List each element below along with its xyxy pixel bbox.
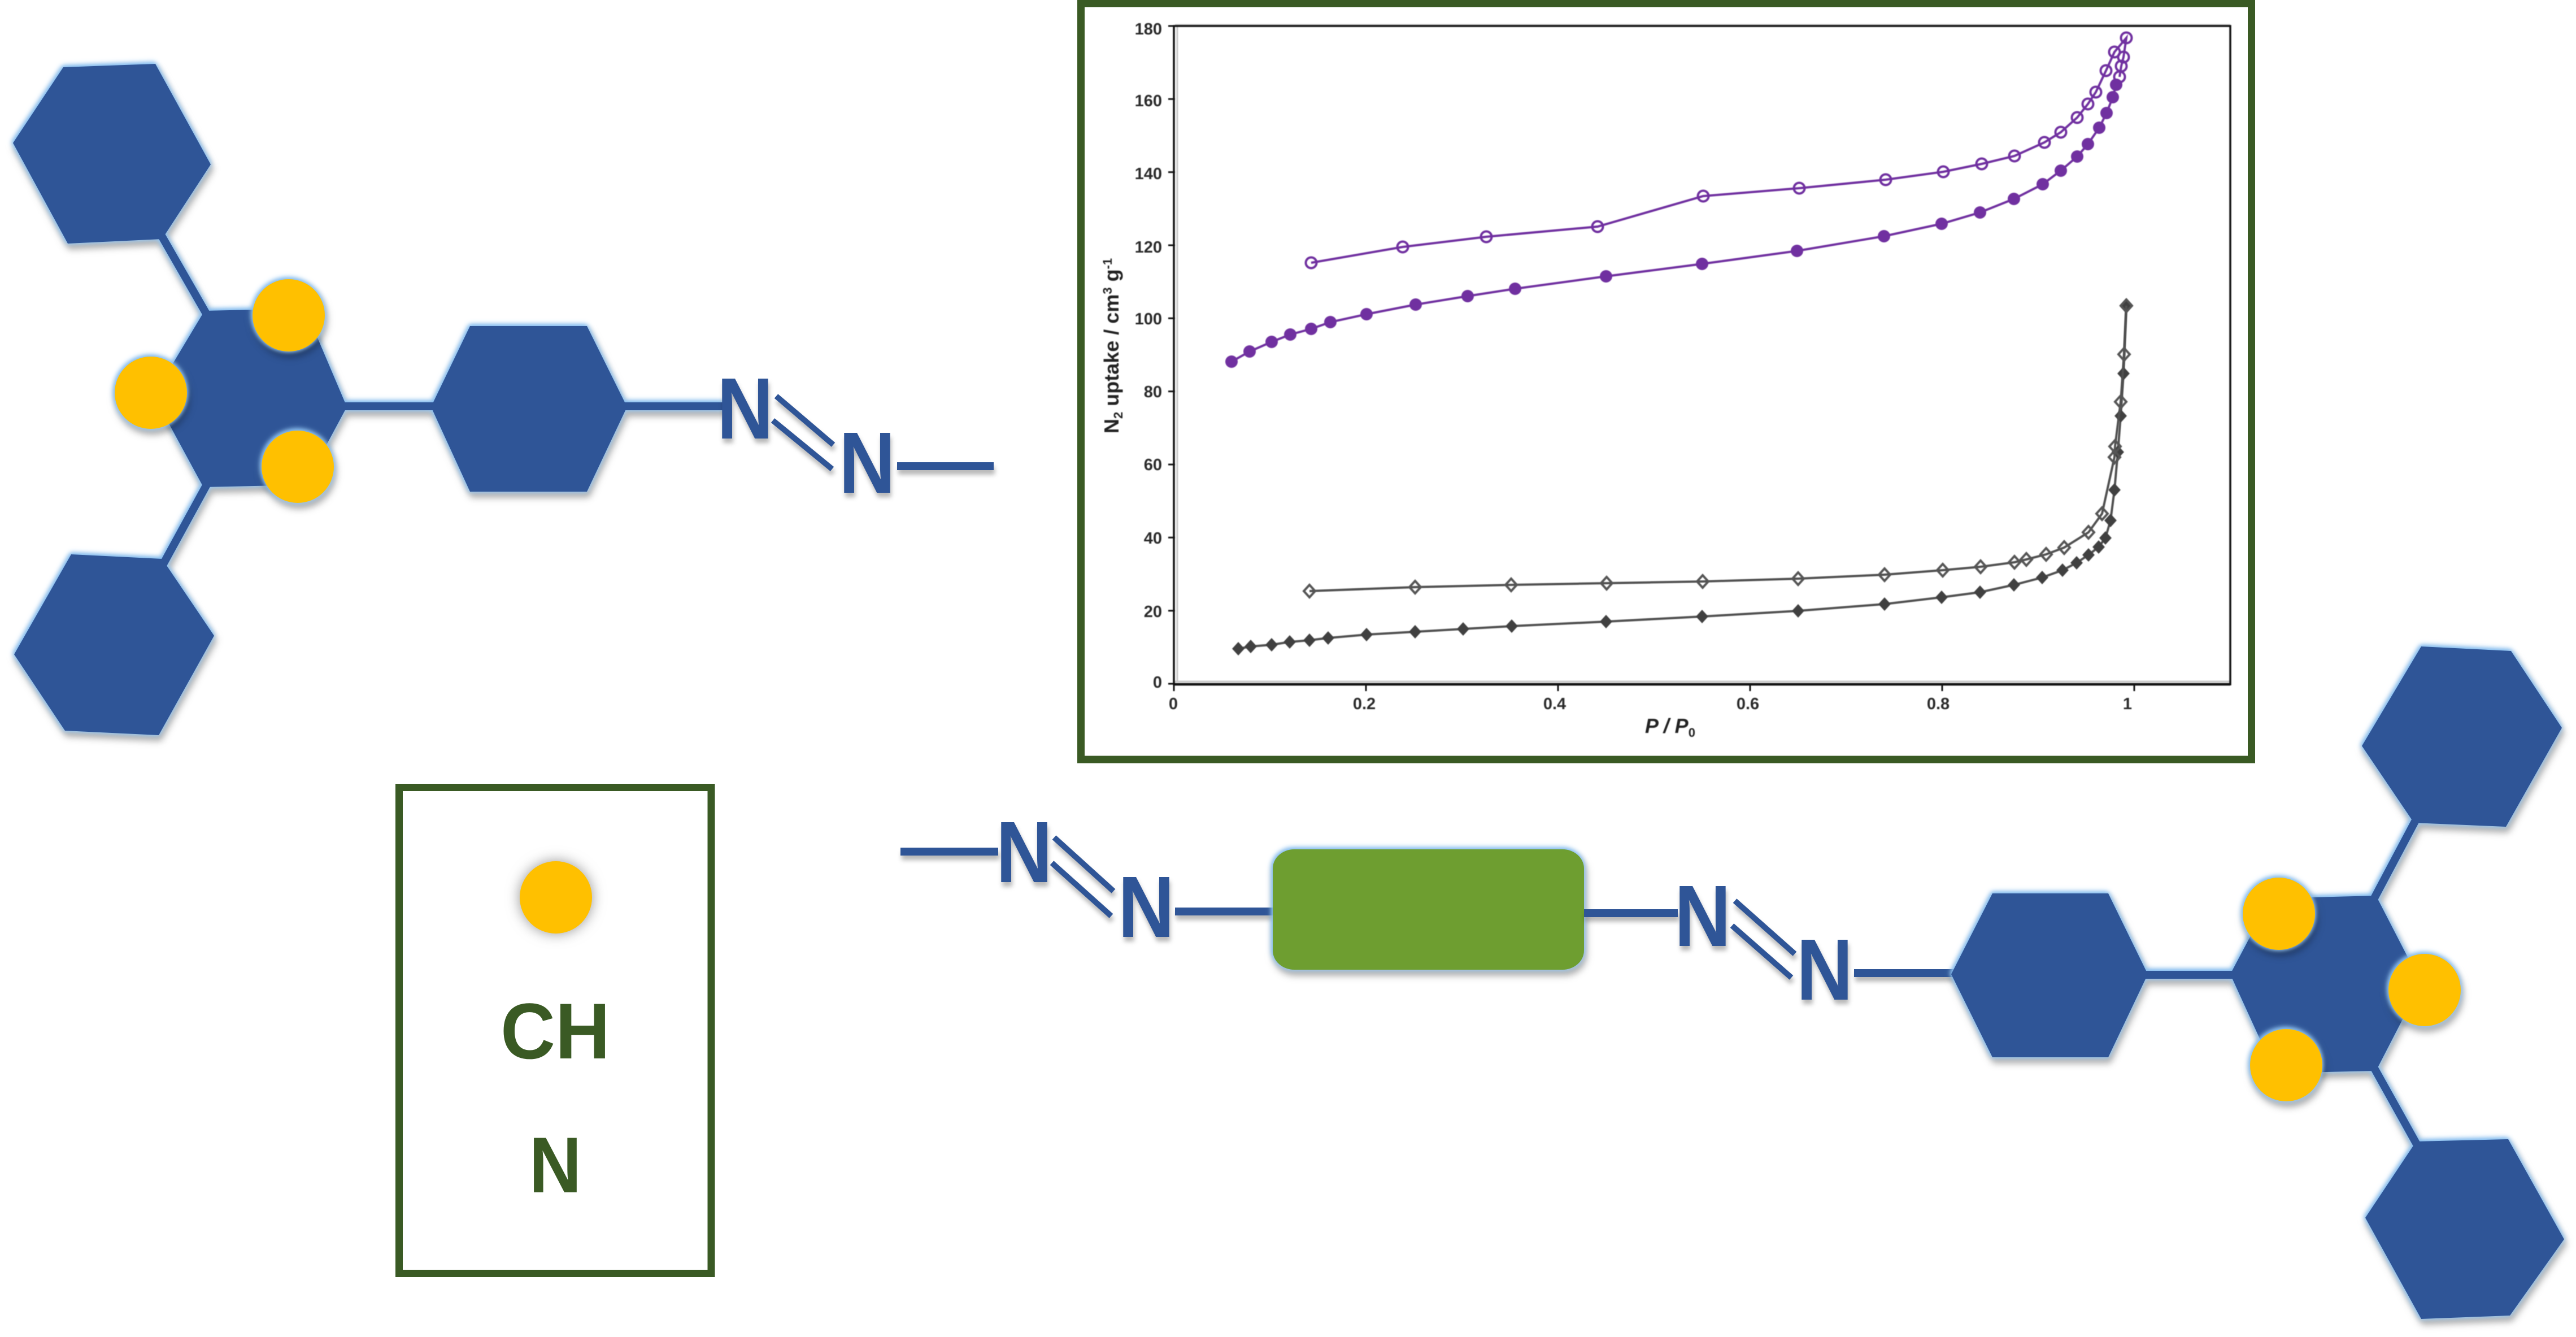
- azo group: N: [839, 414, 895, 511]
- green central block: [1273, 849, 1584, 970]
- molecule: top-left triphenyl azo fragment: [13, 64, 994, 735]
- CH marker: lower: [2250, 1029, 2322, 1101]
- series: purple desorption: [1311, 38, 2126, 263]
- y axis tick labels: 60: [1144, 456, 1162, 474]
- x axis title: 0: [1689, 726, 1695, 740]
- y axis tick labels: 140: [1135, 165, 1162, 183]
- y axis title: -1: [1100, 258, 1115, 269]
- series: grey desorption: [1309, 306, 2126, 591]
- legend box: [399, 788, 711, 1274]
- y axis title: uptake / cm: [1100, 294, 1123, 412]
- CH marker: bottom: [262, 431, 334, 503]
- y axis tick labels: 80: [1144, 383, 1162, 401]
- second azo group: [1584, 867, 1955, 1018]
- chart frame: [1081, 3, 2252, 759]
- second azo group: N: [1674, 867, 1731, 965]
- molecule: lower-right polymer fragment: [900, 646, 2564, 1319]
- azo group and linker bonds: N: [1118, 858, 1174, 956]
- legend: CH label: CH: [501, 987, 610, 1075]
- y axis tick labels: 40: [1144, 529, 1162, 548]
- y axis title: g: [1100, 269, 1123, 287]
- CH marker: upper: [2243, 878, 2315, 950]
- y axis tick labels: 100: [1135, 310, 1162, 328]
- series: grey adsorption: [1238, 306, 2126, 649]
- legend: yellow CH marker: [520, 861, 592, 934]
- y axis tick labels: 180: [1135, 20, 1162, 38]
- y axis title: 3: [1100, 287, 1115, 294]
- CH marker: top: [253, 279, 325, 351]
- x axis tick labels: 0.4: [1543, 695, 1566, 713]
- legend: N label: N: [529, 1121, 582, 1209]
- y axis tick labels: 120: [1135, 238, 1162, 257]
- x axis tick labels: [1169, 695, 2132, 713]
- hexagon rings and bonds: [13, 64, 724, 735]
- y axis title: 2: [1111, 412, 1125, 419]
- CH marker: left: [115, 357, 187, 429]
- y axis tick labels: [1135, 20, 1162, 692]
- y axis tick labels: 160: [1135, 92, 1162, 110]
- panel: N2 uptake isotherm chart: [1081, 3, 2252, 759]
- x axis tick labels: 1: [2123, 695, 2132, 713]
- x axis tick labels: 0.6: [1737, 695, 1759, 713]
- CH marker: right: [2388, 954, 2461, 1026]
- azo group: [717, 360, 994, 511]
- plot axes: [1168, 25, 2230, 691]
- x axis tick labels: 0: [1169, 695, 1178, 713]
- x axis tick labels: 0.2: [1353, 695, 1376, 713]
- x axis tick labels: 0.8: [1927, 695, 1950, 713]
- x axis title: P / P: [1645, 714, 1689, 737]
- y axis tick labels: 0: [1153, 674, 1162, 692]
- y axis tick labels: 20: [1144, 603, 1162, 621]
- azo group and linker bonds: [900, 804, 1277, 956]
- azo group and linker bonds: N: [996, 804, 1052, 901]
- series: purple adsorption: [1232, 85, 2116, 362]
- hexagon rings and bonds: [1951, 646, 2564, 1319]
- second azo group: N: [1796, 921, 1853, 1018]
- y axis title: N: [1100, 419, 1123, 433]
- azo group: N: [717, 360, 773, 457]
